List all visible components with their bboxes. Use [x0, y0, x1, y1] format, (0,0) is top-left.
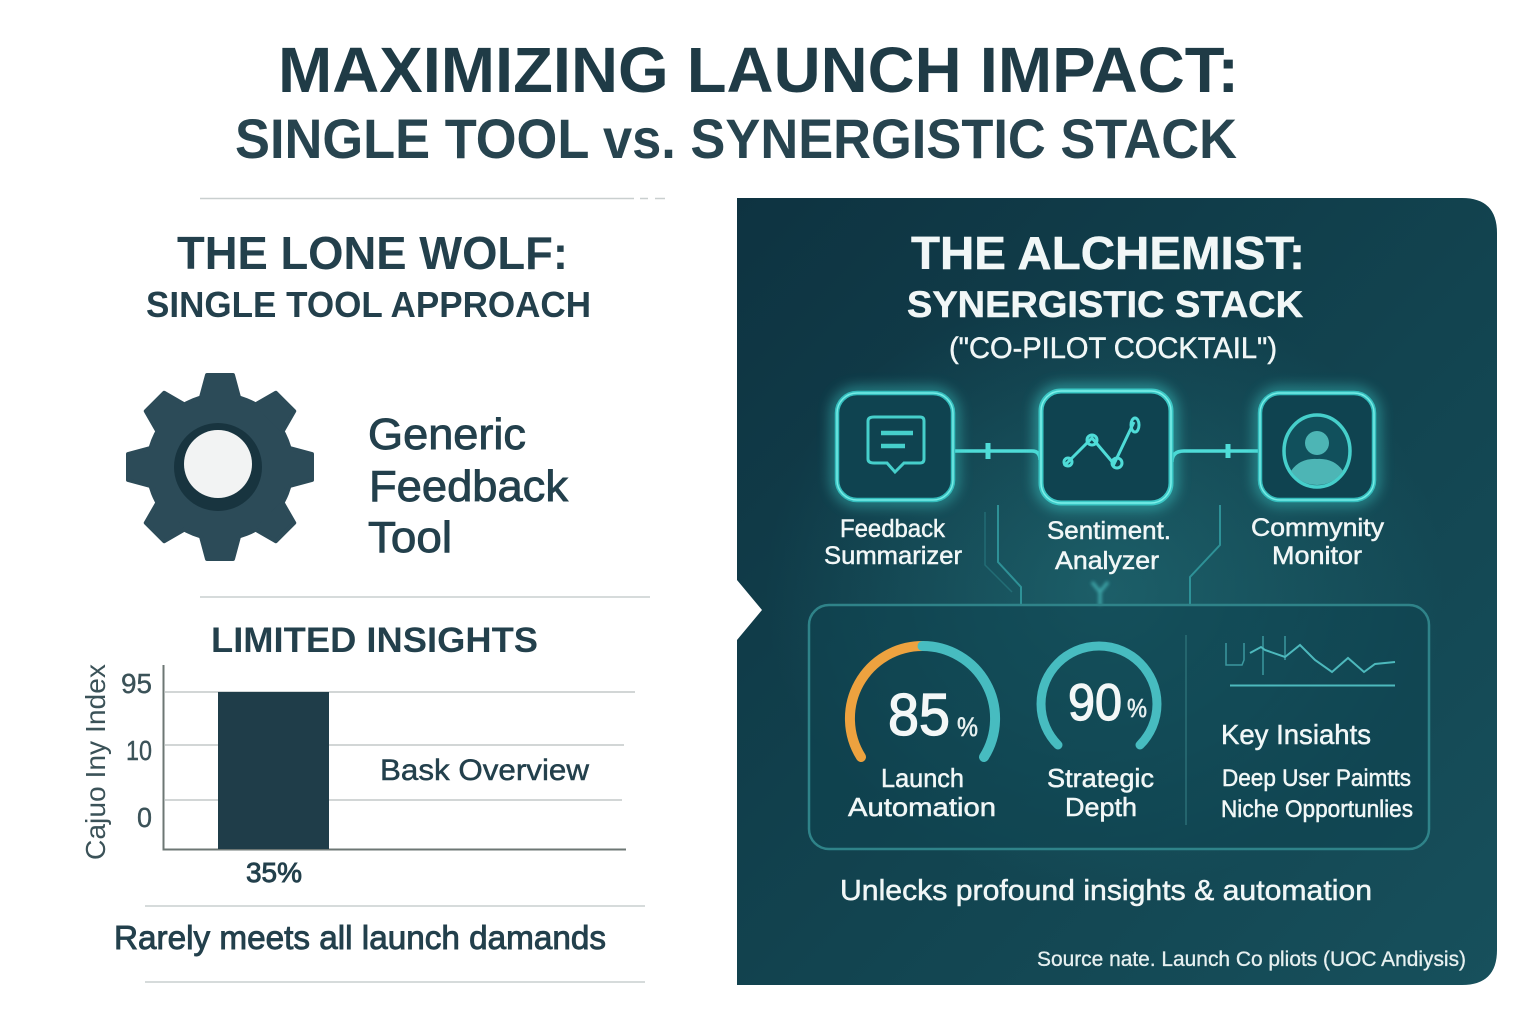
tool: sentiment analyzer	[1041, 391, 1171, 575]
tool: feedback summarizer: Summarizer	[824, 542, 962, 570]
label: generic feedback tool: Feedback	[369, 462, 569, 511]
icon: chat bubble	[868, 417, 924, 472]
title	[235, 34, 1239, 170]
sparkline	[1226, 636, 1395, 686]
title: SINGLE TOOL vs. SYNERGISTIC STACK	[235, 107, 1237, 170]
heading: alchemist	[907, 227, 1305, 365]
gauge: launch automation: 85	[888, 682, 950, 748]
heading: lone wolf: SINGLE TOOL APPROACH	[146, 284, 591, 325]
bar	[218, 692, 329, 849]
key insights: Deep User Paimtts	[1222, 765, 1411, 792]
heading: alchemist: THE ALCHEMIST:	[911, 227, 1305, 279]
connectors	[954, 443, 1259, 606]
heading: lone wolf: THE LONE WOLF:	[177, 227, 568, 279]
heading: lone wolf	[146, 227, 591, 325]
gauge: launch automation: %	[957, 712, 978, 742]
bar note: Bask Overview	[380, 754, 589, 787]
axis labels: 0	[137, 802, 152, 833]
caption: Rarely meets all launch damands	[114, 919, 606, 956]
key insights	[1221, 636, 1413, 823]
source note: Source nate. Launch Co pliots (UOC Andiysis)	[1037, 948, 1466, 971]
label: generic feedback tool: Tool	[368, 513, 452, 562]
gauge: strategic depth	[1041, 646, 1157, 822]
title: MAXIMIZING LAUNCH IMPACT:	[278, 34, 1239, 106]
metrics panel	[809, 605, 1429, 849]
heading: alchemist: SYNERGISTIC STACK	[907, 284, 1303, 325]
icon: user	[1284, 415, 1350, 487]
gauge: strategic depth: 90	[1068, 674, 1122, 732]
bar chart	[80, 664, 635, 888]
heading: alchemist: ("CO-PILOT COCKTAIL")	[949, 332, 1277, 365]
gauge: strategic depth: Strategic	[1047, 763, 1154, 793]
gauge: launch automation: Launch	[881, 763, 964, 793]
label: generic feedback tool: Generic	[368, 410, 526, 459]
axis labels: 95	[121, 668, 152, 699]
bar value: 35%	[246, 857, 302, 888]
tool: community monitor: Commynity	[1251, 514, 1385, 542]
tool: feedback summarizer: Feedback	[840, 515, 945, 543]
tool: community monitor: Monitor	[1272, 542, 1362, 570]
panel: the alchemist	[737, 198, 1497, 985]
axis labels	[80, 664, 152, 860]
gauge: launch automation: Automation	[848, 792, 996, 822]
axis labels: Cajuo Iny Index	[80, 664, 111, 860]
tool: sentiment analyzer: Analyzer	[1055, 547, 1159, 575]
gauge: launch automation	[848, 646, 996, 822]
tool: community monitor	[1251, 393, 1385, 570]
panel: the lone wolf	[80, 227, 635, 956]
tagline: Unlecks profound insights & automation	[840, 875, 1372, 907]
label: generic feedback tool	[368, 410, 569, 562]
icon: trend line	[1064, 418, 1139, 468]
axis labels: 10	[126, 735, 152, 766]
icon: gear	[128, 375, 312, 559]
gauge: strategic depth: Depth	[1065, 792, 1137, 822]
key insights: Niche Opportunlies	[1221, 796, 1413, 823]
key insights: Key Insiahts	[1221, 719, 1371, 750]
tool: feedback summarizer	[824, 393, 962, 570]
heading: limited insights: LIMITED INSIGHTS	[211, 621, 538, 660]
tool: sentiment analyzer: Sentiment.	[1047, 517, 1171, 545]
gauge: strategic depth: %	[1127, 693, 1147, 723]
panel background	[737, 198, 1497, 985]
